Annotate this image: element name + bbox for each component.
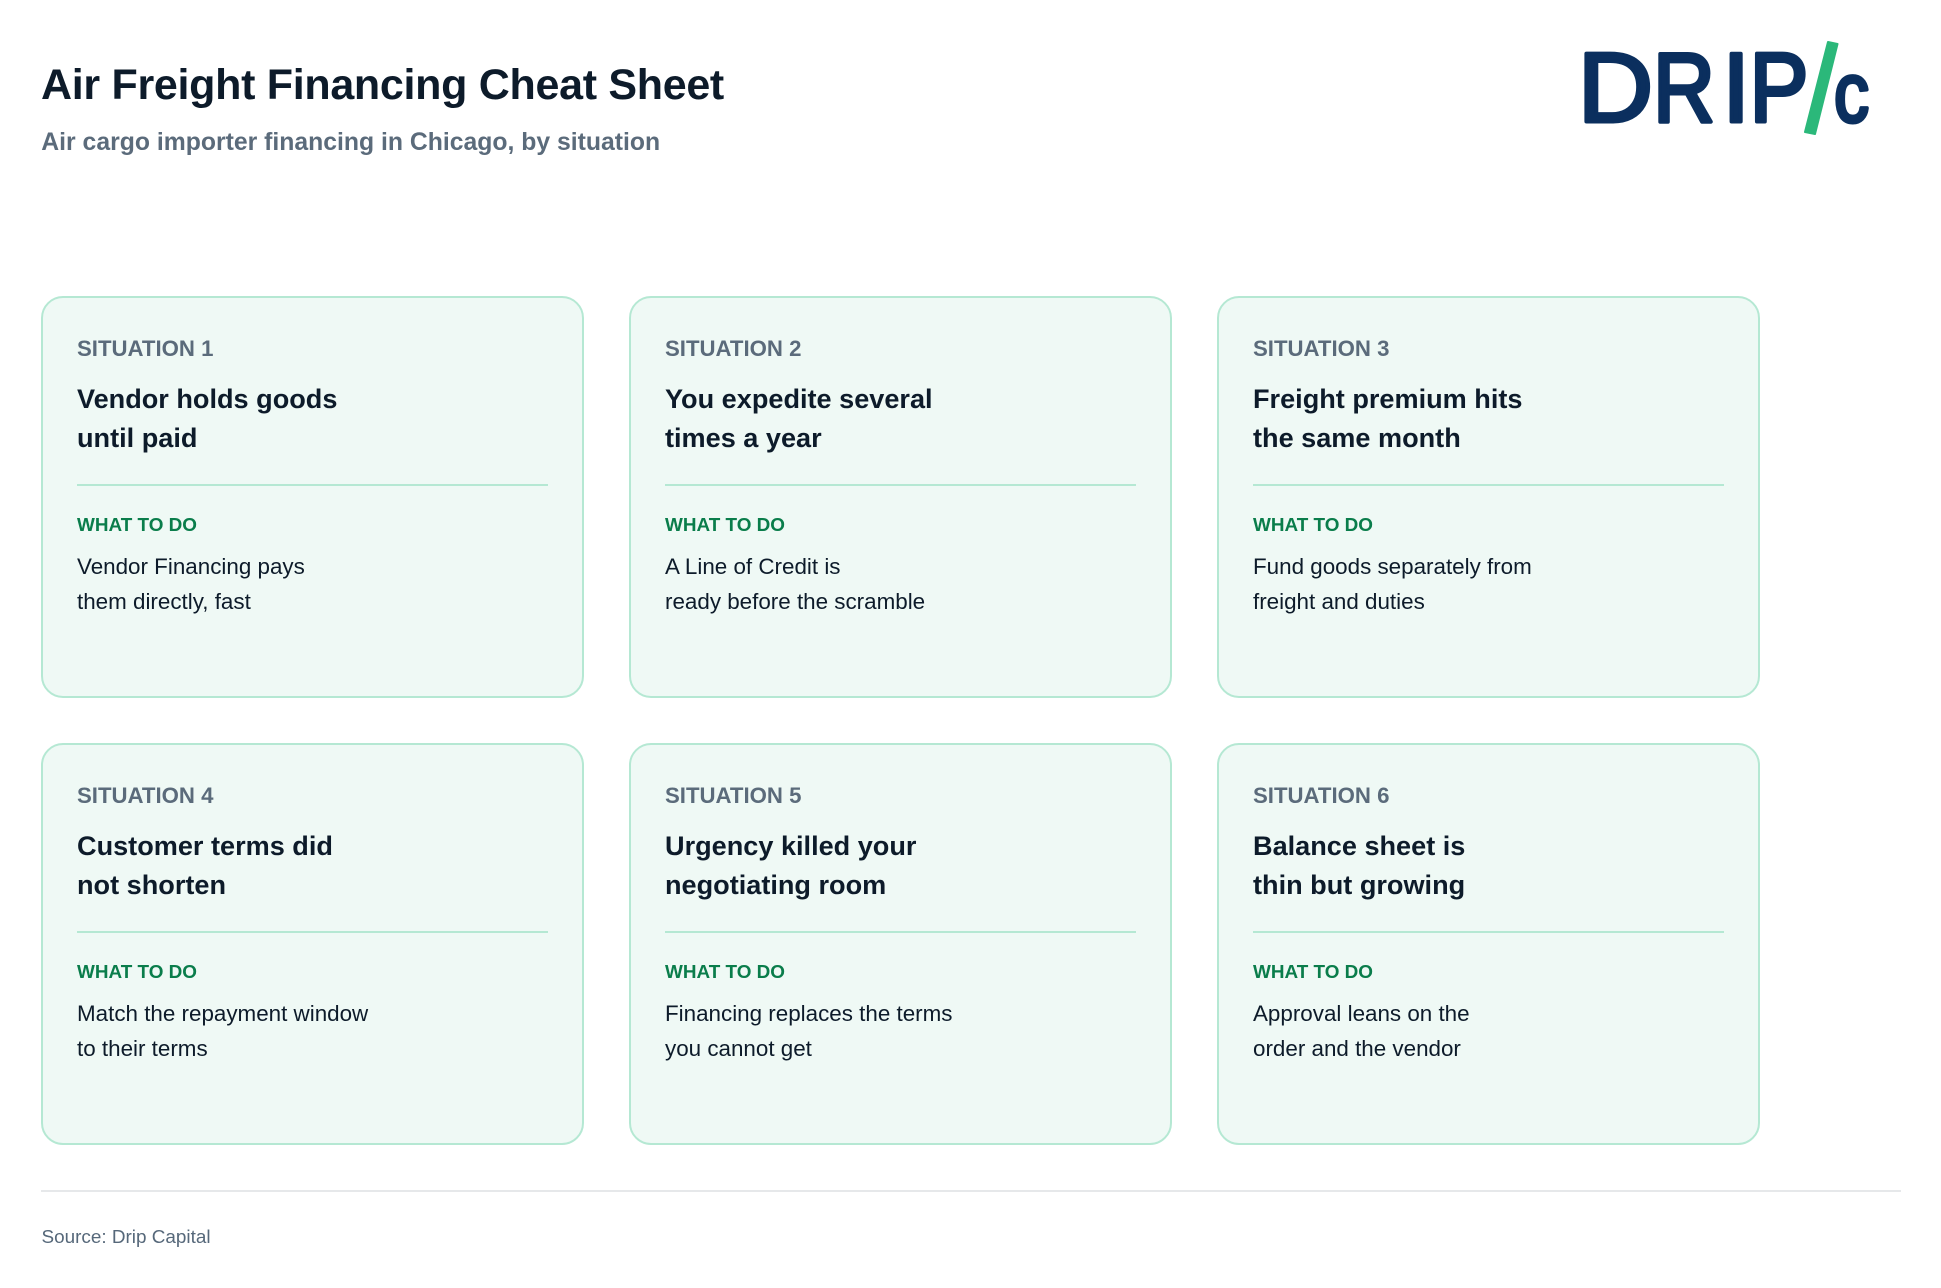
panel: situation 5 (629, 742, 1172, 1144)
situation label: SITUATION 3 (1253, 336, 1389, 360)
what to do text: Vendor Financing pays (77, 554, 305, 578)
source note: Source: Drip Capital (42, 1226, 211, 1248)
what to do label: WHAT TO DO (77, 515, 197, 536)
subtitle: Air cargo importer financing in Chicago, by situation (41, 128, 660, 156)
what to do text: to their terms (77, 1036, 208, 1061)
what to do text: ready before the scramble (665, 589, 925, 614)
what to do label: WHAT TO DO (1253, 962, 1373, 983)
what to do text (1253, 1000, 1470, 1061)
situation heading: Freight premium hits (1253, 382, 1522, 414)
situation heading: negotiating room (665, 868, 886, 900)
what to do text (77, 554, 305, 614)
what to do text (665, 554, 925, 614)
situation heading: Balance sheet is (1253, 830, 1465, 860)
situation heading: the same month (1253, 422, 1461, 452)
situation heading: Customer terms did (77, 830, 333, 860)
what to do text: Financing replaces the terms (665, 1000, 952, 1026)
panel: situation 4 (41, 742, 584, 1144)
situation heading (665, 830, 916, 900)
what to do text: A Line of Credit is (665, 554, 840, 578)
logo: Drip Capital: R (1653, 32, 1715, 142)
situation heading: not shorten (77, 868, 226, 900)
panel: situation 6 (1217, 742, 1760, 1144)
panel: situation 2 (629, 296, 1172, 698)
what to do label: WHAT TO DO (665, 962, 785, 983)
what to do label: WHAT TO DO (665, 515, 785, 536)
panel: situation 1 (41, 296, 584, 698)
situation heading (665, 382, 933, 452)
situation heading: Urgency killed your (665, 830, 916, 860)
situation label: SITUATION 1 (77, 336, 213, 360)
situation heading (77, 382, 337, 452)
what to do label: WHAT TO DO (77, 962, 197, 983)
situation heading: Vendor holds goods (77, 382, 337, 414)
what to do text: you cannot get (665, 1036, 812, 1061)
logo: Drip Capital: I (1722, 32, 1750, 142)
what to do label: WHAT TO DO (1253, 515, 1373, 536)
what to do text: order and the vendor (1253, 1036, 1461, 1061)
situation heading: times a year (665, 422, 822, 452)
situation heading (77, 830, 333, 900)
title: Air Freight Financing Cheat Sheet (41, 60, 724, 108)
panel: situation 3 (1217, 296, 1760, 698)
situation heading: thin but growing (1253, 868, 1465, 900)
what to do text (665, 1000, 952, 1061)
situation heading (1253, 830, 1465, 900)
what to do text: Match the repayment window (77, 1000, 368, 1026)
situation label: SITUATION 4 (77, 782, 213, 808)
what to do text (1253, 554, 1532, 614)
situation label: SITUATION 6 (1253, 782, 1389, 808)
what to do text: Fund goods separately from (1253, 554, 1532, 578)
logo: Drip Capital: D (1578, 32, 1653, 142)
what to do text: them directly, fast (77, 589, 251, 614)
situation heading: until paid (77, 422, 197, 452)
situation heading: You expedite several (665, 382, 933, 414)
what to do text: freight and duties (1253, 589, 1425, 614)
logo: Drip Capital: c (1834, 46, 1869, 140)
logo: Drip Capital: P (1750, 32, 1808, 142)
what to do text: Approval leans on the (1253, 1000, 1470, 1026)
situation label: SITUATION 2 (665, 336, 801, 360)
what to do text (77, 1000, 368, 1061)
situation label: SITUATION 5 (665, 782, 801, 808)
situation heading (1253, 382, 1522, 452)
logo: Drip Capital (1578, 32, 1869, 142)
